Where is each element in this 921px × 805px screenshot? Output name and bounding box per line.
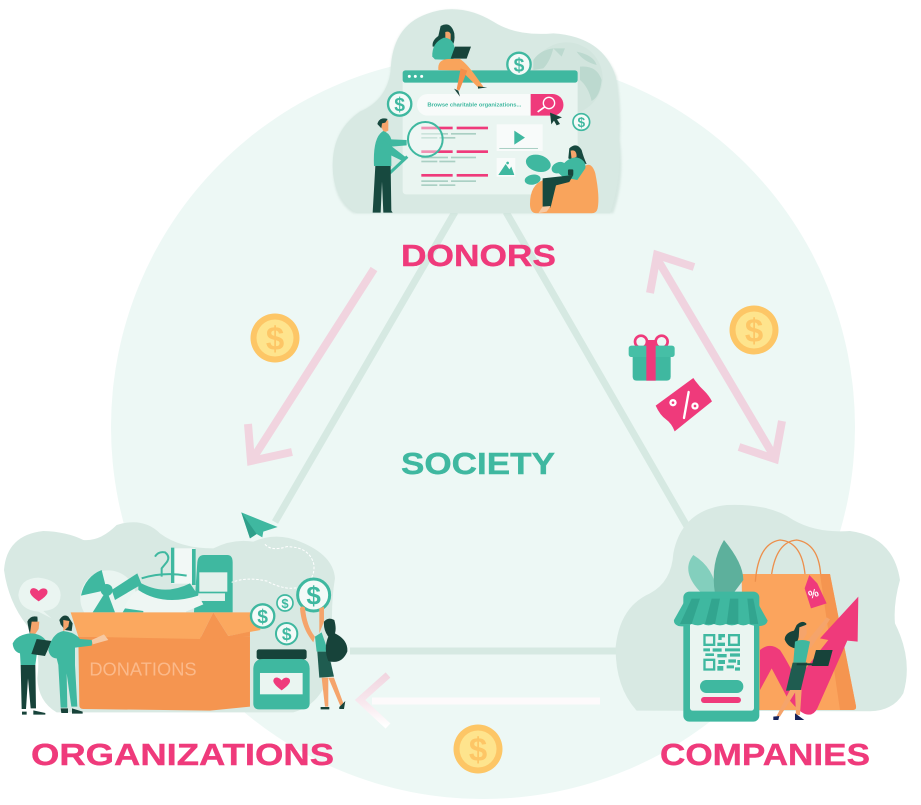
dollar badges: $ [514,55,525,76]
arrow: companies to donors, two-way [650,255,782,459]
search result rows [421,127,488,186]
awning [674,599,768,626]
paper plane [241,512,278,538]
heading: companies: COMPANIES [660,737,870,772]
icon: gift box [629,336,675,381]
woman holding coin [300,606,347,709]
arrow: donors to organizations [248,269,374,461]
donors blob [333,9,619,213]
donations box: DONATIONS [89,659,197,680]
panel: companies illustration [616,505,907,722]
two men with clipboard [13,616,108,715]
falling dollar coins: $ [306,580,321,610]
heading: society: SOCIETY [401,446,555,481]
dollar badges [388,53,590,130]
monstera leaves [524,152,568,186]
coin: donors side [250,314,300,362]
growth arrow [760,597,858,715]
society background circle [111,55,855,799]
heading: donors: DONORS [401,238,556,273]
book [194,555,233,612]
image thumbnail [497,158,515,177]
donations box [71,612,261,711]
striped scarf [172,548,195,584]
price tag: % [807,587,820,602]
panel: donors illustration [333,9,621,213]
search bar [417,94,564,125]
falling dollar coins: $ [281,596,289,611]
woman with laptop [432,24,487,97]
dashed flight path [232,544,314,588]
arrow: companies to organizations [360,675,600,726]
dollar badges: $ [394,95,405,116]
coin: bottom [454,724,502,774]
video thumbnail [497,124,543,151]
QR code [703,634,740,671]
shirt [123,590,203,612]
coin: companies side: $ [745,312,763,349]
coin: donors side: $ [266,320,284,357]
beach ball [80,570,136,626]
falling dollar coins [251,579,330,644]
donated goods [80,548,233,626]
browser window [403,70,578,194]
storefront phone [674,592,768,722]
woman on bean bag [524,145,598,213]
falling dollar coins: $ [282,624,292,644]
speech bubble with heart [18,578,61,618]
shopping bag [742,540,856,710]
leaves [688,540,743,593]
coin: bottom: $ [469,731,487,768]
donation jar [253,649,310,709]
woman with laptop pointing [773,617,833,720]
dollar badges: $ [578,115,586,130]
icon: discount ticket [656,378,712,431]
coin: companies side [730,306,778,354]
search bar: Browse charitable organizations... [427,103,522,109]
falling dollar coins: $ [257,607,268,628]
man with magnifying glass [373,118,443,213]
heading: organizations: ORGANIZATIONS [31,737,334,772]
relationship triangle [275,212,688,651]
globe [531,42,603,114]
panel: organizations illustration [4,512,347,715]
hanger [142,552,187,578]
price tag [805,575,827,608]
